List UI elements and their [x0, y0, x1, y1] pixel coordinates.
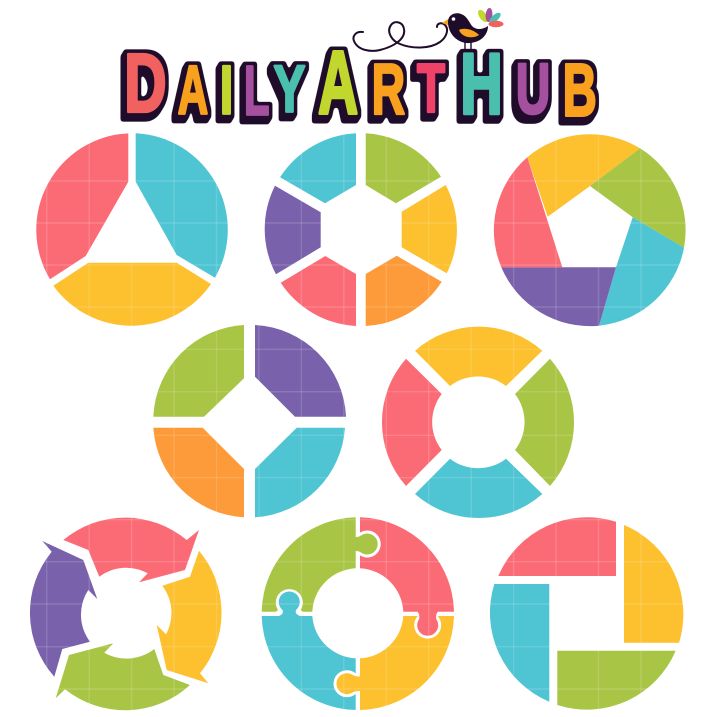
diagram: four-part arrow cycle: [30, 518, 222, 710]
segment: cyan: [136, 133, 228, 278]
arrow: pink: [63, 518, 199, 582]
wordmark: [124, 33, 597, 132]
segment: pink: [494, 157, 562, 267]
segment: pink: [382, 359, 442, 486]
segment: purple: [265, 186, 321, 274]
tail feather: purple: [485, 8, 493, 22]
wordmark: D: [124, 38, 167, 130]
diagram: four-part puzzle ring: [262, 517, 454, 710]
tail feather: pink: [488, 21, 504, 27]
segment: purple: [501, 267, 616, 326]
bird legs: [465, 40, 471, 50]
bird wing: [459, 29, 479, 37]
wordmark: A: [318, 33, 358, 132]
diagram: three-part triangle ring: [36, 133, 228, 326]
segment: pink: [281, 256, 356, 326]
segment: yellow: [53, 263, 211, 326]
segment: yellow: [527, 134, 640, 217]
diagram: five-part pentagon shutter: [494, 134, 686, 326]
segment: orange: [366, 256, 442, 326]
segment: green: [590, 148, 686, 248]
bird eye: [452, 17, 455, 21]
tail feather: lime: [476, 8, 490, 24]
segment: yellow: [402, 185, 457, 273]
puzzle piece: cyan: [262, 591, 356, 710]
segment: cyan: [280, 133, 356, 203]
wordmark: I: [220, 51, 233, 129]
bird beak: [442, 18, 450, 26]
diagram: four-part diamond ring: [153, 325, 346, 517]
bird body: [448, 13, 488, 43]
wordmark: U: [516, 49, 550, 129]
arrow: purple: [30, 541, 97, 677]
segment: green: [366, 133, 441, 203]
segment: yellow: [415, 327, 542, 386]
arrow: green: [56, 643, 190, 710]
arrow: yellow: [157, 551, 222, 683]
wordmark: T: [417, 50, 445, 127]
puzzle piece: yellow: [336, 616, 454, 710]
segment: cyan: [490, 584, 549, 702]
segment: yellow: [624, 525, 683, 643]
segment: green: [557, 651, 676, 710]
segment: cyan: [255, 428, 345, 517]
puzzle piece: green: [262, 517, 378, 612]
segment: purple: [255, 325, 346, 417]
tail feather: teal: [488, 11, 502, 25]
diagram: six-part hexagon ring: [265, 133, 457, 326]
icon: swirl line: [353, 22, 447, 51]
diagram: four-part round ring: [382, 327, 574, 518]
segment: cyan: [415, 459, 542, 518]
segment: green: [515, 359, 574, 486]
wordmark: Y: [274, 53, 305, 127]
wordmark: B: [563, 50, 597, 132]
wordmark: R: [372, 49, 405, 129]
icon: bird: [442, 8, 504, 50]
segment: orange: [153, 428, 244, 517]
wordmark: H: [460, 35, 503, 132]
segment: cyan: [599, 217, 684, 326]
wordmark: L: [244, 53, 269, 130]
logo: Daily Art Hub: [124, 8, 597, 132]
segment: green: [153, 325, 244, 417]
diagram: four-part square pinwheel: [490, 517, 683, 710]
wordmark: A: [178, 52, 208, 129]
segment: pink: [498, 517, 616, 576]
segment: pink: [36, 133, 128, 279]
puzzle piece: pink: [360, 517, 454, 636]
